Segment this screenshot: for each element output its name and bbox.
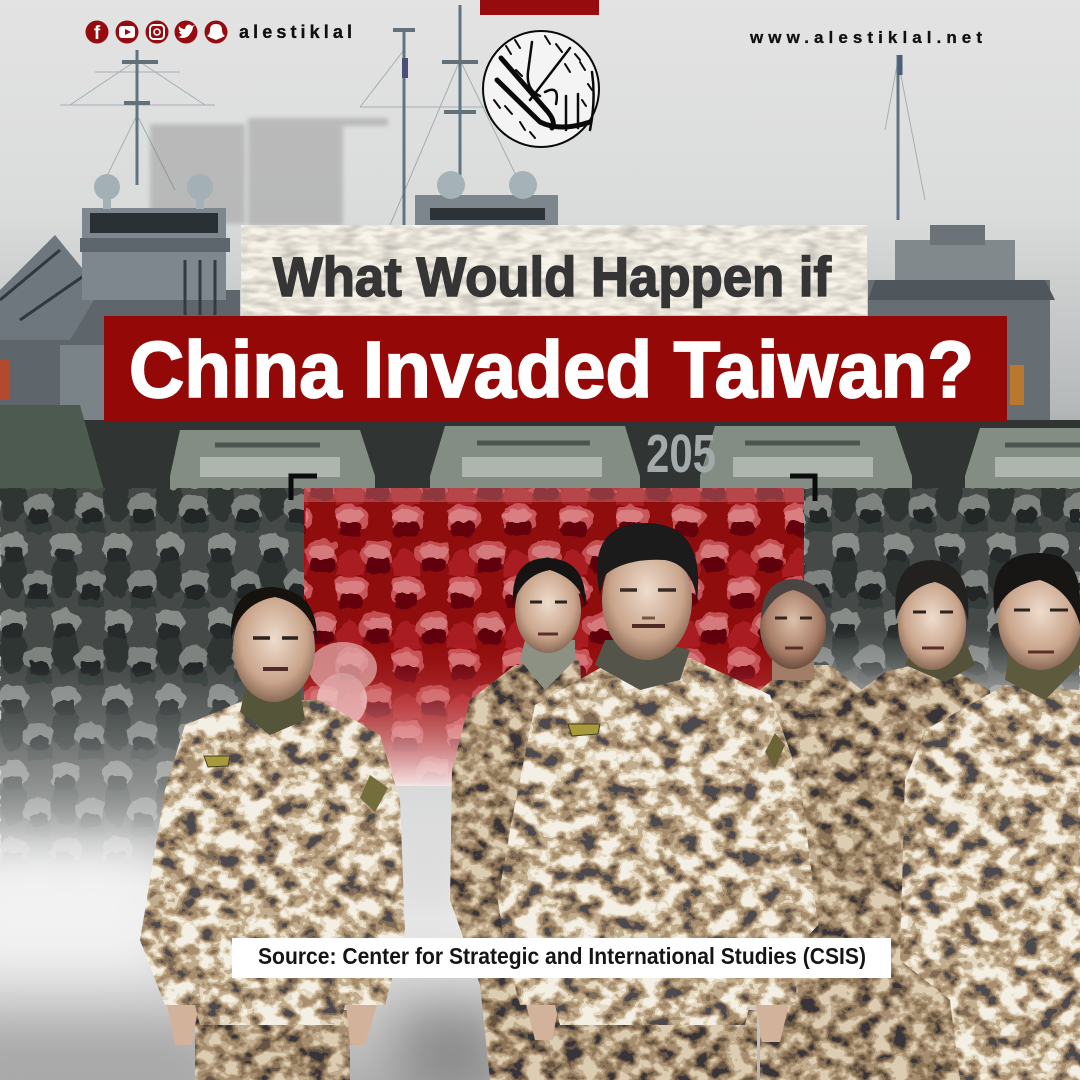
- pants: [195, 1010, 350, 1080]
- central leader Xi: [498, 523, 818, 1080]
- icon: instagram: [146, 20, 168, 44]
- tank 1: [0, 405, 104, 490]
- icon: facebook: [86, 20, 108, 44]
- officer left front: [140, 587, 405, 1080]
- soldiers right: [804, 488, 1080, 694]
- arm patch: [765, 733, 785, 768]
- tank 4: [700, 426, 912, 495]
- soldiers left: [0, 488, 310, 890]
- chest badge: [204, 756, 230, 767]
- right ship: [868, 225, 1055, 420]
- red soldiers panel: [304, 488, 804, 786]
- arm patch: [360, 775, 388, 812]
- hair: [597, 523, 698, 600]
- eyes, mouth: [253, 636, 298, 640]
- left ship superstructure: [82, 208, 226, 300]
- uniform: [498, 658, 818, 1025]
- center ship: [415, 171, 558, 227]
- social icons: [86, 20, 228, 44]
- officer second from right: [822, 560, 1000, 1080]
- officer far right front: [900, 553, 1080, 1080]
- face: [233, 594, 315, 702]
- hair: [761, 579, 827, 620]
- officer far right back: [760, 579, 862, 1080]
- officer second from left: [450, 558, 600, 1080]
- hair: [231, 587, 317, 640]
- features: [775, 616, 812, 620]
- logo emblem: [483, 31, 599, 147]
- eyes, nose, mouth: [620, 588, 676, 592]
- title top panel: [241, 225, 867, 315]
- hull number 205: 205: [646, 424, 716, 484]
- icon: snapchat: [204, 20, 228, 44]
- icon: twitter: [174, 20, 198, 44]
- left ship crane: [0, 235, 100, 340]
- pale soldier face: [309, 642, 377, 727]
- title line one: What Would Happen if: [273, 245, 831, 308]
- source text: Source: Center for Strategic and International Studies (CSIS): [258, 943, 866, 969]
- distant bridge silhouette: [150, 118, 388, 226]
- ship masts: [60, 5, 925, 225]
- source box: [232, 938, 891, 978]
- corner bracket right: [790, 476, 815, 501]
- top red tab: [480, 0, 599, 15]
- left ship radar domes: [94, 174, 213, 209]
- left ship: [0, 174, 240, 420]
- chest badge: [568, 724, 600, 736]
- corner bracket left: [291, 476, 317, 500]
- hands: [525, 1000, 790, 1042]
- website: www.alestiklal.net: [749, 28, 982, 47]
- collar: [595, 640, 690, 690]
- dark band behind tanks: [0, 420, 1080, 492]
- body: [760, 665, 862, 1080]
- uniform: [140, 700, 405, 1025]
- left ship hull: [0, 290, 240, 420]
- fog lower left: [0, 800, 500, 1080]
- tank 3: [430, 426, 640, 495]
- tank 2: [170, 430, 375, 495]
- neck: [772, 650, 814, 680]
- collar: [240, 690, 305, 735]
- title red panel: [104, 316, 1007, 422]
- pants: [552, 1010, 757, 1080]
- head: [760, 585, 826, 669]
- hands: [165, 995, 380, 1045]
- tank 5: [965, 428, 1080, 495]
- brand name: alestiklal: [239, 22, 352, 42]
- icon: facebook: f: [94, 23, 101, 44]
- title line two: China Invaded Taiwan?: [129, 325, 974, 414]
- icon: youtube: [116, 20, 138, 44]
- tanks row: [0, 405, 1080, 495]
- face: [602, 540, 692, 660]
